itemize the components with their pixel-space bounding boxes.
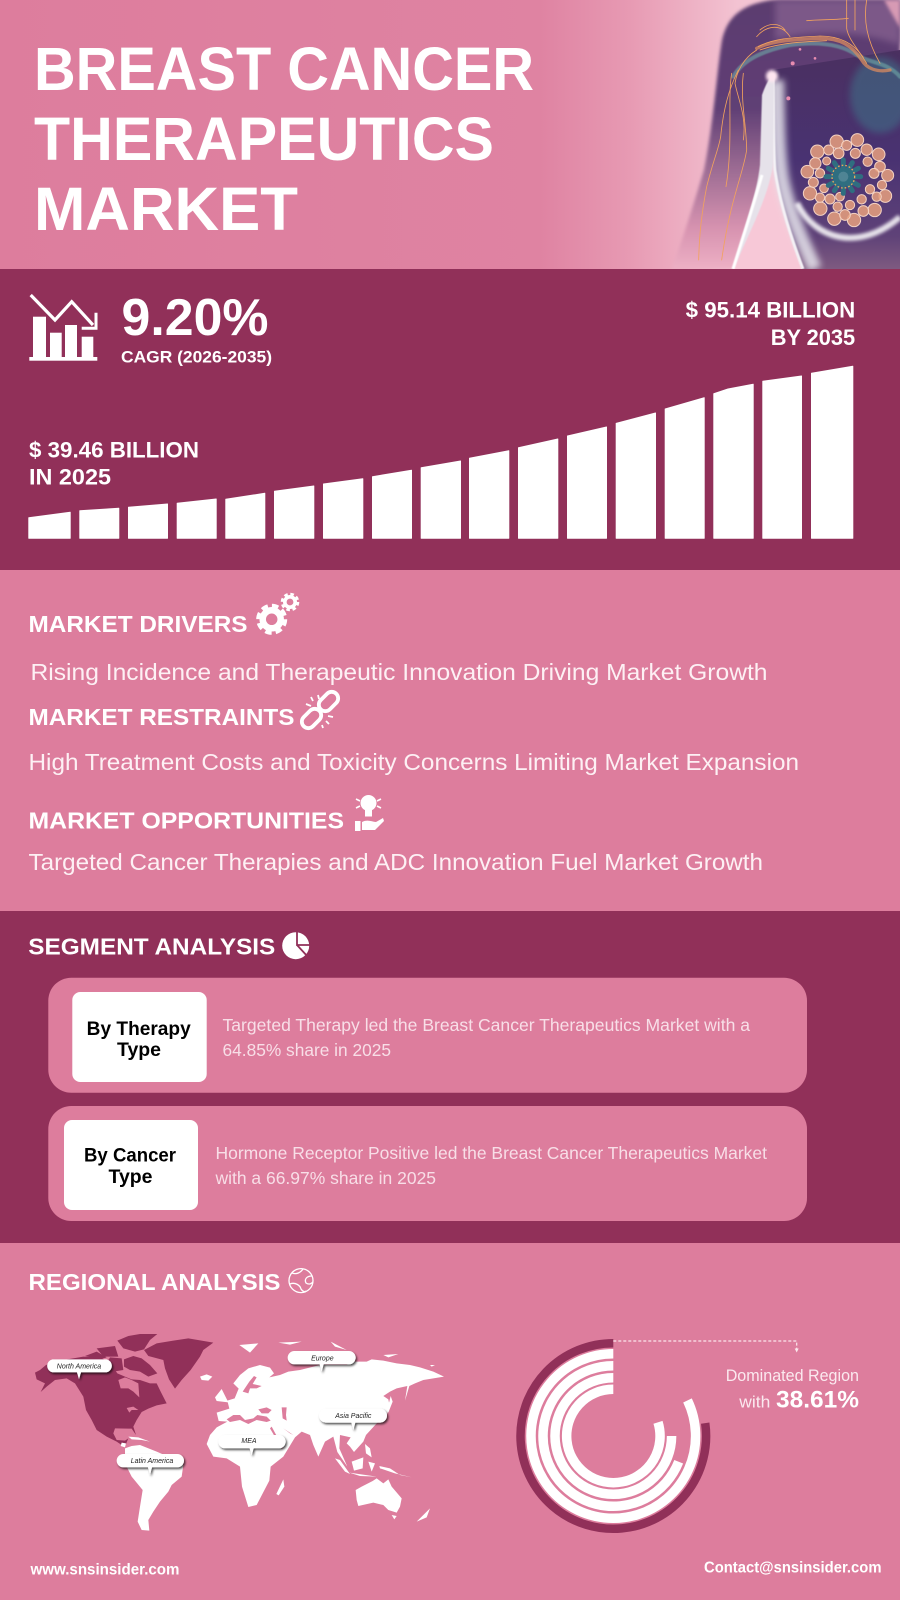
label box [72, 992, 207, 1082]
text: restraint: High Treatment Costs and Toxicity Concerns Limiting Market Expansion [28, 749, 799, 775]
label text: By Cancer [84, 1146, 177, 1167]
upper chest haze [775, 0, 900, 45]
heading: market drivers: MARKET DRIVERS [28, 611, 248, 637]
label text: By Therapy [87, 1019, 191, 1040]
bluish shade [850, 57, 900, 133]
label: europe [288, 1351, 356, 1372]
text: driver: Rising Incidence and Therapeutic Innovation Driving Market Growth [30, 659, 768, 685]
arrow: dashed callout connector [613, 1341, 799, 1352]
description [222, 1015, 750, 1060]
continents: rest of world [121, 1342, 444, 1531]
panel: segment analysis [0, 911, 900, 1243]
great britain [215, 1389, 228, 1402]
end value [686, 298, 855, 350]
torso [772, 50, 900, 269]
label: north america [47, 1359, 112, 1379]
light gap between arm and torso [733, 165, 802, 269]
rosette centre [838, 172, 848, 182]
description [215, 1143, 767, 1188]
lobules [801, 134, 894, 227]
start value: $ 39.46 BILLION [29, 438, 199, 463]
madagascar [276, 1479, 284, 1495]
world map [35, 1334, 444, 1531]
end value: $ 95.14 BILLION [686, 298, 855, 323]
rosette highlights [832, 165, 855, 188]
title: BREAST CANCER [34, 35, 534, 103]
illustration: torso with tumour [672, 0, 900, 269]
icon: globe [289, 1269, 313, 1293]
panel: market dynamics [28, 594, 799, 875]
label text: Type [117, 1040, 161, 1061]
armpit glow [766, 70, 778, 82]
start value: IN 2025 [29, 465, 111, 490]
label: asia pacific: Asia Pacific [334, 1413, 372, 1420]
label: north america: North America [57, 1363, 101, 1370]
tumour cluster [801, 134, 894, 227]
description: Hormone Receptor Positive led the Breast Cancer Therapeutics Market [216, 1143, 767, 1163]
callout: dominated region [726, 1366, 859, 1413]
callout: dominated region: 38.61% [776, 1386, 859, 1413]
label: mea [218, 1435, 286, 1455]
band background [0, 269, 900, 570]
title: MARKET [34, 175, 298, 243]
label: asia pacific [319, 1409, 387, 1430]
rosette core [826, 160, 861, 193]
card: by therapy type [48, 978, 807, 1093]
heading: segment analysis: SEGMENT ANALYSIS [28, 933, 275, 959]
outer ring: dominant region [521, 1343, 706, 1529]
card: by cancer type [48, 1106, 807, 1221]
icon: broken chain [299, 689, 341, 731]
callout: dominated region: Dominated Region [726, 1366, 859, 1385]
label: europe: Europe [311, 1356, 334, 1363]
description: 64.85% share in 2025 [222, 1040, 391, 1060]
label: mea: MEA [241, 1438, 257, 1445]
title: THERAPEUTICS [34, 105, 494, 173]
teal nerve band [733, 43, 900, 77]
label: latin america: Latin America [131, 1458, 173, 1465]
arm and shoulder [672, 0, 900, 269]
start value [29, 438, 199, 490]
glow on torso edge [777, 80, 815, 269]
heading: market opportunities: MARKET OPPORTUNITIES [28, 807, 344, 833]
icon: pie chart [282, 932, 310, 959]
small pink nodes [786, 48, 816, 100]
pink neck corner [884, 0, 900, 28]
breast outline glow [797, 203, 900, 238]
chart: radial share rings [521, 1343, 706, 1529]
heading: market restraints: MARKET RESTRAINTS [28, 704, 294, 730]
CAGR label: CAGR (2026-2035) [121, 347, 272, 366]
label box [64, 1120, 198, 1210]
bar chart: market growth [29, 366, 853, 538]
region: north america (dominant) [35, 1334, 213, 1445]
label: latin america [117, 1454, 184, 1475]
caribbean [121, 1437, 150, 1447]
australia [356, 1478, 402, 1513]
iceland [200, 1374, 212, 1381]
band background [0, 911, 900, 1243]
south america [125, 1445, 183, 1531]
end value: BY 2035 [771, 325, 855, 350]
eurasia and africa [207, 1359, 444, 1507]
description: with a 66.97% share in 2025 [215, 1168, 436, 1188]
footer contact: Contact@snsinsider.com [704, 1560, 882, 1576]
arm highlight line [733, 175, 762, 269]
panel: hero header [0, 0, 900, 269]
panel: regional analysis [28, 1269, 859, 1531]
label text: Type [108, 1167, 152, 1188]
icon: hand with bulb [355, 795, 384, 831]
hudson bay and great lakes cutouts [118, 1377, 139, 1397]
vessel highlights [699, 0, 880, 260]
title [34, 35, 534, 243]
seas cut from eurasia [227, 1376, 293, 1448]
japan [387, 1396, 393, 1413]
bright edge on torso [773, 75, 803, 269]
vessels in zoom units [699, 0, 900, 260]
icon: gears [258, 594, 298, 633]
icon: falling chart [29, 295, 97, 361]
footer website: www.snsinsider.com [30, 1562, 179, 1578]
arctic islands [239, 1342, 435, 1367]
description: Targeted Therapy led the Breast Cancer Therapeutics Market with a [222, 1015, 750, 1035]
callout: dominated region: with [738, 1392, 770, 1411]
main vessel band [757, 38, 890, 71]
new zealand and tasmania [392, 1508, 430, 1522]
label text [84, 1146, 177, 1188]
panel: market size [0, 269, 900, 570]
hero gradient background [0, 0, 900, 269]
inner rings [531, 1354, 696, 1518]
text: opportunity: Targeted Cancer Therapies and ADC Innovation Fuel Market Growth [28, 849, 763, 875]
heading: regional analysis: REGIONAL ANALYSIS [28, 1269, 280, 1295]
bright strip on arm side [738, 79, 774, 260]
CAGR value: 9.20% [122, 289, 268, 347]
label text [87, 1019, 191, 1061]
southeast asia islands [335, 1444, 412, 1477]
